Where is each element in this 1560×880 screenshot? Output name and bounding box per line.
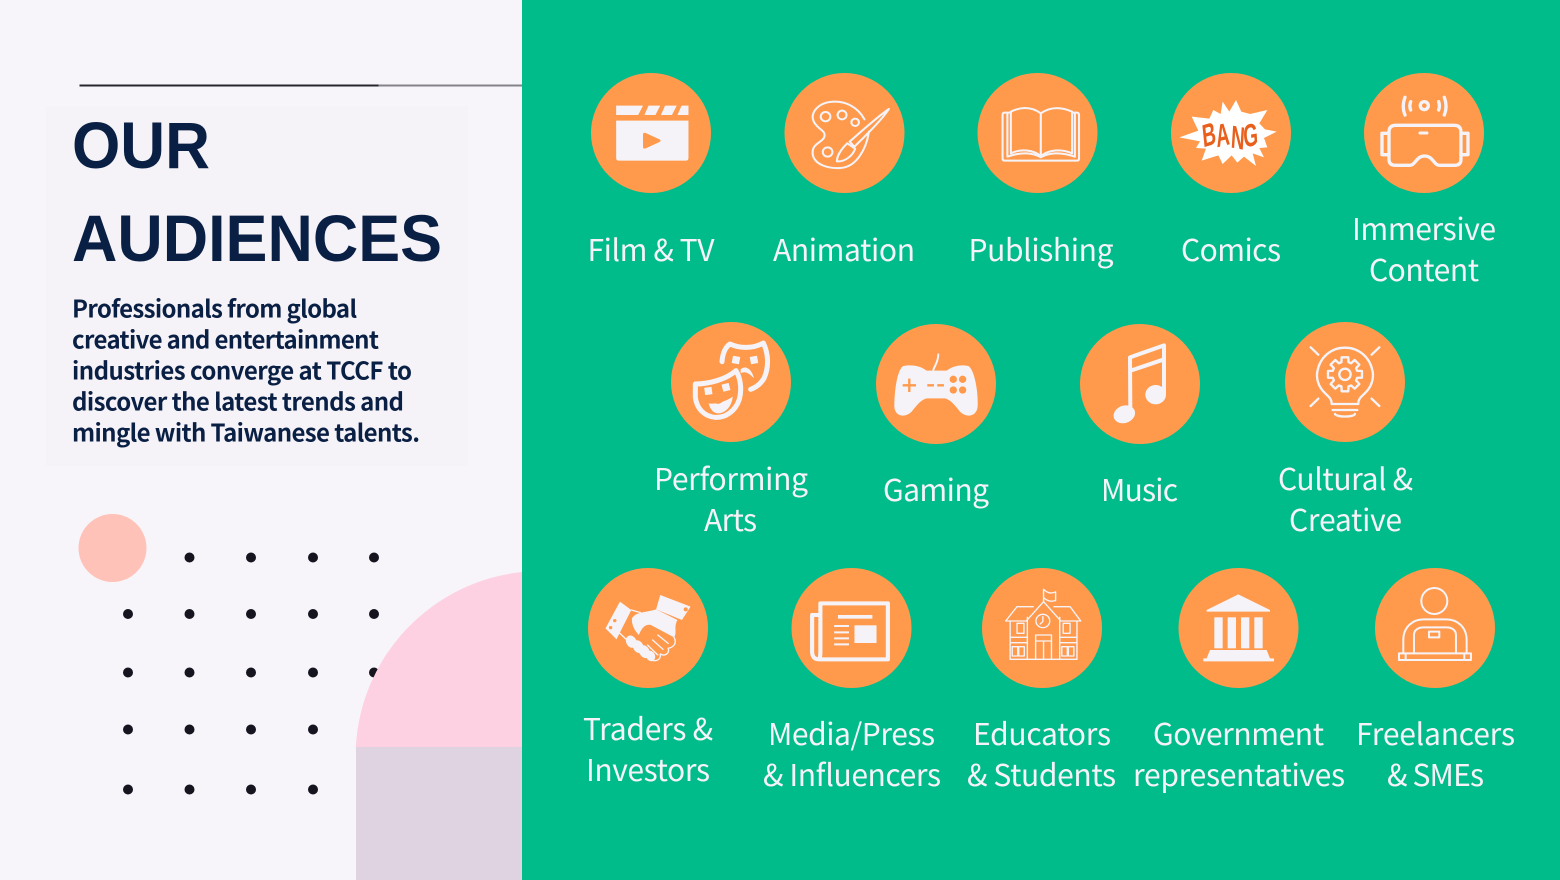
label: & SMEs: [1387, 751, 1484, 795]
audience: Freelancers and SMEs: [1356, 568, 1515, 795]
dot grid: [123, 552, 379, 794]
label: Media/Press: [768, 710, 935, 754]
audience: Performing Arts: [654, 322, 808, 540]
icon: music notes: [1111, 345, 1166, 426]
label: [1352, 205, 1496, 290]
label: Cultural &: [1278, 455, 1413, 499]
icon: game controller: [894, 354, 978, 416]
decorative peach circle: [78, 514, 146, 582]
icon: palette and brush: [813, 102, 889, 168]
label: Animation: [773, 226, 915, 270]
label: Arts: [704, 496, 757, 540]
icon: bang burst: BANG: [1198, 116, 1259, 156]
icon: person at laptop: [1399, 588, 1471, 660]
label: [1278, 455, 1413, 540]
label: Music: [1101, 466, 1178, 510]
description: creative and entertainment: [72, 320, 379, 356]
label: Educators: [973, 710, 1111, 754]
audience: Cultural and Creative: [1278, 322, 1413, 540]
audience: Traders and Investors: [583, 568, 713, 790]
label: Government: [1153, 710, 1324, 754]
label: [1133, 710, 1345, 795]
icon: government building: [1203, 594, 1274, 661]
description: Professionals from global: [72, 290, 357, 324]
heading block: [46, 106, 468, 466]
label: [763, 710, 941, 795]
label: & Students: [967, 751, 1116, 795]
label: Immersive: [1352, 205, 1496, 249]
icon: open book: [1003, 108, 1079, 161]
audience: Gaming: [876, 324, 996, 510]
audience: Animation: [773, 73, 915, 270]
icon: handshake: [605, 595, 691, 663]
label: Creative: [1289, 496, 1402, 540]
label: Traders &: [583, 705, 713, 749]
icon: VR headset: [1382, 97, 1468, 165]
audience: Publishing: [968, 73, 1114, 270]
audience: Media, Press and Influencers: [763, 568, 941, 795]
description: industries converge at TCCF to: [72, 352, 412, 386]
description: discover the latest trends and: [72, 382, 404, 418]
audience: Comics: [1171, 73, 1291, 270]
icon: bang burst: [1179, 100, 1277, 166]
audience: Educators and Students: [967, 568, 1116, 795]
lilac block: [356, 747, 522, 880]
label: [583, 705, 713, 790]
title: AUDIENCES: [72, 201, 442, 275]
label: [967, 710, 1116, 795]
icon: newspaper: [812, 603, 888, 659]
label: Comics: [1181, 226, 1281, 270]
icon: clapperboard: [616, 106, 688, 161]
left background panel: [0, 0, 522, 880]
label: [654, 455, 808, 540]
right green panel: [522, 0, 1560, 880]
label: [1356, 710, 1515, 795]
icon: light bulb with gear: [1311, 347, 1379, 416]
description: mingle with Taiwanese talents.: [72, 414, 420, 448]
label: Performing: [654, 455, 808, 499]
label: Freelancers: [1356, 710, 1515, 754]
label: Film & TV: [588, 226, 715, 270]
title: OUR: [72, 108, 210, 182]
audience: Film and TV: [588, 73, 715, 270]
audience: Immersive Content: [1352, 73, 1496, 290]
audience: Government representatives: [1133, 568, 1345, 795]
title: [72, 108, 442, 275]
icon: school building: [1006, 589, 1081, 659]
label: & Influencers: [763, 751, 941, 795]
audience: Music: [1080, 324, 1200, 510]
label: Publishing: [968, 226, 1114, 270]
pink arch shape: [356, 572, 522, 747]
top rule: [80, 84, 522, 86]
description: [72, 290, 420, 448]
label: representatives: [1133, 751, 1345, 795]
label: Gaming: [883, 466, 989, 510]
icon: theatre masks: [695, 343, 768, 417]
label: Content: [1369, 246, 1479, 290]
label: Investors: [586, 746, 710, 790]
